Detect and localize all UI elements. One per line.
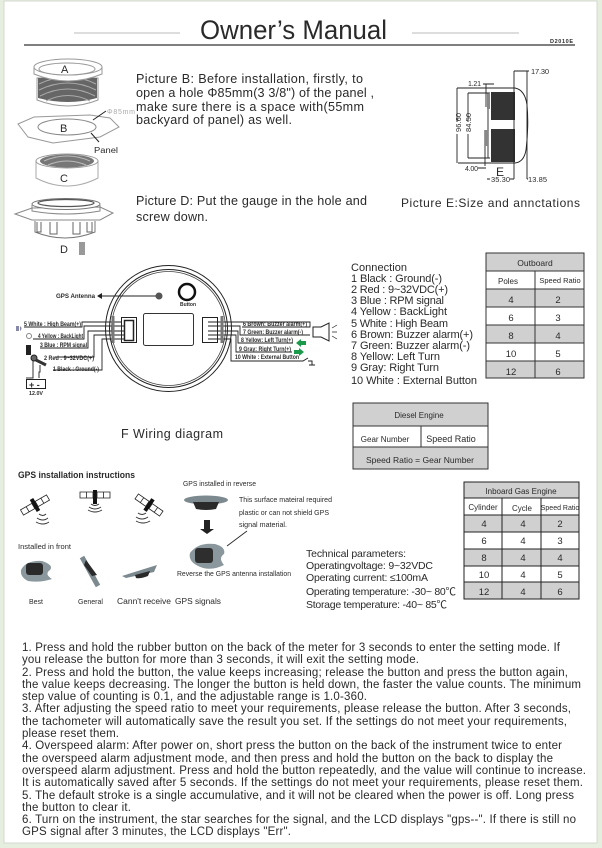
surface note: signal material.: [239, 520, 287, 529]
ground switch: [300, 358, 315, 365]
GPS antenna: GPS Antenna: [56, 294, 96, 300]
ignition key: [26, 355, 46, 378]
table: inboard gas engine: [464, 482, 579, 599]
title: Owner’s Manual: [200, 15, 387, 45]
right connector: [202, 316, 310, 361]
Picture D text: screw down.: [136, 210, 208, 224]
right wire labels: [235, 322, 307, 361]
Picture B text: backyard of panel) as well.: [136, 113, 292, 127]
right wire labels: 10 White : External Button: [235, 355, 299, 361]
GPS antenna: [56, 292, 162, 300]
table: outboard: Outboard: [517, 258, 553, 268]
picture B: panel: Φ85mm: [107, 109, 135, 116]
table: inboard gas engine: 4: [520, 587, 526, 598]
instructions text: please reset them.: [22, 728, 119, 740]
reversed antenna on surface: [190, 544, 224, 569]
connection list: 4 Yellow : BackLight: [351, 306, 447, 318]
picture A: gauge: [34, 59, 102, 106]
table: inboard gas engine: Inboard Gas Engine: [485, 487, 557, 496]
table: inboard gas engine: 3: [557, 536, 563, 547]
satellite right: [133, 491, 165, 519]
table: inboard gas engine: 2: [557, 519, 563, 530]
connection list: 5 White : High Beam: [351, 318, 448, 330]
table: inboard gas engine: 12: [479, 587, 489, 598]
instructions text: the overspeed alarm adjustment mode, and then press and hold the button on the back to display the: [22, 753, 553, 765]
GPS reverse label: GPS installed in reverse: [183, 479, 256, 488]
satellite center: [80, 490, 110, 512]
Picture E: size drawing: 96.60: [454, 113, 463, 132]
technical parameters: Technical parameters:: [306, 548, 406, 560]
table: inboard gas engine: 4: [481, 519, 487, 530]
table: outboard: 6: [555, 367, 561, 378]
table: diesel engine: Gear Number: [361, 435, 410, 444]
wiring diagram caption: F Wiring diagram: [121, 427, 223, 441]
Picture E caption: Picture E:Size and annctations: [401, 196, 580, 210]
table: outboard: [486, 253, 584, 378]
Picture E: size drawing: 35.30: [491, 175, 510, 184]
antenna best: [21, 561, 52, 582]
instructions text: 5. The default stroke is a single accumulative, and it will not be cleared when the power is off. Long press: [22, 790, 574, 802]
table: diesel engine: Diesel Engine: [394, 411, 444, 420]
left connector: [24, 316, 136, 370]
wiring diagram: [16, 266, 337, 397]
table: outboard: 12: [506, 367, 516, 378]
Picture B text: [136, 72, 374, 127]
right wire labels: 9 Gray: Right Turn(+): [239, 347, 291, 353]
instructions text: you release the button for more than 3 seconds, it will exit the setting mode.: [22, 654, 419, 666]
installed in front label: Installed in front: [18, 542, 72, 551]
left wire labels: 4 Yellow : BackLight: [38, 334, 83, 340]
table: outboard: 4: [508, 295, 514, 306]
antenna captions: Best: [29, 597, 44, 606]
picture D: gauge installed: D: [60, 244, 68, 256]
battery: + -: [29, 380, 40, 390]
RPM sensor: [26, 345, 31, 355]
reverse installation label: Reverse the GPS antenna installation: [177, 569, 291, 578]
table: inboard gas engine: Cylinder: [468, 503, 498, 512]
Picture E: size drawing: 1.21: [468, 81, 481, 88]
table: inboard gas engine: 5: [557, 570, 563, 581]
Picture D text: Picture D: Put the gauge in the hole and: [136, 194, 367, 208]
instructions text: 4. Overspeed alarm: After power on, short press the button on the back of the instrument twice to enter: [22, 740, 562, 752]
table: inboard gas engine: 6: [481, 536, 487, 547]
right wire labels: 6 Brown: Buzzer alarm(+): [243, 322, 307, 328]
Picture E: size drawing: 84.50: [464, 113, 473, 132]
satellite right signal: [136, 513, 150, 523]
table: outboard: 10: [506, 349, 516, 360]
battery: 12.0V: [29, 391, 44, 397]
left wire labels: 1 Black : Ground(-): [53, 367, 99, 373]
table: outboard: 8: [508, 331, 514, 342]
right wire labels: 8 Yellow: Left Turn(+): [241, 338, 293, 344]
antenna captions: General: [78, 597, 103, 606]
right turn arrow: [294, 348, 304, 356]
Picture E: size drawing: [454, 67, 549, 184]
picture B: panel: Panel: [94, 146, 118, 155]
Picture B text: make sure there is a space with(55mm: [136, 100, 364, 114]
table: outboard: 4: [555, 331, 561, 342]
left wire labels: 5 White : High Beam(+): [24, 322, 81, 328]
picture A: gauge: A: [61, 64, 69, 76]
left wire labels: 2 Red : 9~32VDC(+): [44, 356, 94, 362]
instructions text: It is automatically saved after 5 seconds. If the settings do not meet your requirements, please reset them.: [22, 777, 583, 789]
Picture E: size drawing: 4.00: [465, 166, 478, 173]
button: [179, 284, 195, 300]
left turn arrow: [296, 339, 306, 347]
satellite left: [19, 491, 51, 519]
table: inboard gas engine: Cycle: [512, 504, 533, 513]
Picture D text: [136, 194, 367, 224]
Picture E: size drawing: E: [496, 165, 504, 179]
technical parameters: Operating temperature: -30~ 80℃: [306, 586, 456, 598]
down arrow: [200, 520, 214, 534]
picture C: ring nut: [36, 154, 98, 186]
table: diesel engine: Speed Ratio: [426, 434, 476, 444]
instructions text: 6. Turn on the instrument, the star searches for the signal, and the LCD displays "gps--". If there is still no: [22, 814, 576, 826]
Picture B text: Picture B: Before installation, firstly, to: [136, 72, 363, 86]
connection list: [351, 262, 477, 387]
antenna cannot receive: [122, 565, 157, 578]
table: inboard gas engine: 10: [479, 570, 489, 581]
picture D: gauge installed: [15, 198, 113, 256]
backlight icon: [26, 334, 32, 338]
surface note: [239, 495, 332, 529]
connection list: 7 Green: Buzzer alarm(-): [351, 340, 470, 352]
connection list: 6 Brown: Buzzer alarm(+): [351, 329, 473, 341]
instructions text: the tachometer will automatically save the result you set. If the settings do not meet your requirements,: [22, 716, 567, 728]
table: inboard gas engine: 6: [557, 587, 563, 598]
instructions text: 1. Press and hold the rubber button on the back of the meter for 3 seconds to enter the setting mode. If: [22, 642, 561, 654]
connection list: 9 Gray: Right Turn: [351, 362, 439, 374]
instructions text: overspeed alarm adjustment. Press and hold the button repeatedly, and the value will continue to increase.: [22, 765, 586, 777]
instructions text: the value keeps decreasing. The longer the button is held down, the faster the value counts. The minimum: [22, 679, 581, 691]
picture B: panel: B: [60, 123, 67, 135]
technical parameters: Operatingvoltage: 9~32VDC: [306, 560, 433, 572]
connection list: 3 Blue : RPM signal: [351, 295, 444, 307]
pointer line: [227, 531, 247, 546]
connection list: 2 Red : 9~32VDC(+): [351, 284, 448, 296]
LCD: [144, 314, 194, 346]
Picture B text: open a hole Φ85mm(3 3/8") of the panel ,: [136, 86, 374, 100]
left wire labels: [24, 322, 99, 373]
picture C: ring nut: C: [60, 173, 68, 185]
Picture E: size drawing: 13.85: [528, 175, 547, 184]
battery: [26, 380, 46, 397]
table: diesel engine: [353, 403, 488, 469]
table: outboard: Poles: [498, 277, 518, 286]
surface note: This surface mateiral required: [239, 495, 332, 504]
table: outboard: 3: [555, 313, 561, 324]
table: outboard: 5: [555, 349, 561, 360]
technical parameters: [306, 548, 456, 611]
wiring diagram: Button: [180, 302, 196, 308]
technical parameters: Storage temperature: -40~ 85℃: [306, 599, 448, 611]
table: outboard: 2: [555, 295, 561, 306]
connection list: 8 Yellow: Left Turn: [351, 351, 440, 363]
speaker: [313, 323, 337, 341]
technical parameters: Operating current: ≤100mA: [306, 572, 428, 584]
reverse GPS antenna: [184, 496, 228, 510]
table: inboard gas engine: 4: [520, 570, 526, 581]
table: inboard gas engine: 4: [520, 519, 526, 530]
left wire labels: 3 Blue : RPM signal: [40, 343, 87, 349]
instructions text: the button to clear it.: [22, 802, 131, 814]
right wire labels: 7 Green: Buzzer alarm(-): [243, 330, 303, 336]
connection list: 10 White : External Button: [351, 375, 477, 387]
table: outboard: Speed Ratio: [539, 276, 581, 285]
instructions text: GPS signal after 3 minutes, the LCD displays "Err".: [22, 826, 291, 838]
picture B: panel: [18, 109, 135, 155]
antenna captions: [29, 597, 221, 606]
high beam icon: [16, 326, 22, 331]
table: inboard gas engine: 4: [520, 553, 526, 564]
table: diesel engine: Speed Ratio = Gear Number: [366, 455, 474, 465]
table: inboard gas engine: 8: [481, 553, 487, 564]
connection list: Connection: [351, 262, 407, 274]
satellite left signal: [36, 514, 49, 524]
instructions text: 3. After adjusting the speed ratio to meet your requirements, please release the button. After 3 seconds,: [22, 703, 571, 715]
Picture E: size drawing: 17.30: [531, 67, 549, 76]
GPS heading: GPS installation instructions: [18, 470, 135, 480]
document code: D2010E: [550, 39, 573, 45]
instructions text: step value of counting is 0.1, and the adjustable range is 1.0-360.: [22, 691, 367, 703]
table: outboard: 6: [508, 313, 514, 324]
antenna captions: GPS signals: [175, 597, 221, 606]
table: inboard gas engine: Speed Ratio: [541, 505, 579, 512]
antenna general: [82, 557, 98, 586]
antenna captions: Cann't receive: [117, 597, 172, 606]
table: inboard gas engine: 4: [520, 536, 526, 547]
connection list: 1 Black : Ground(-): [351, 273, 442, 285]
instructions text: [22, 642, 586, 838]
surface note: plastic or can not shield GPS: [239, 508, 329, 517]
instructions text: 2. Press and hold the button, the value keeps increasing; release the button and press the button again,: [22, 667, 568, 679]
table: inboard gas engine: 4: [557, 553, 563, 564]
